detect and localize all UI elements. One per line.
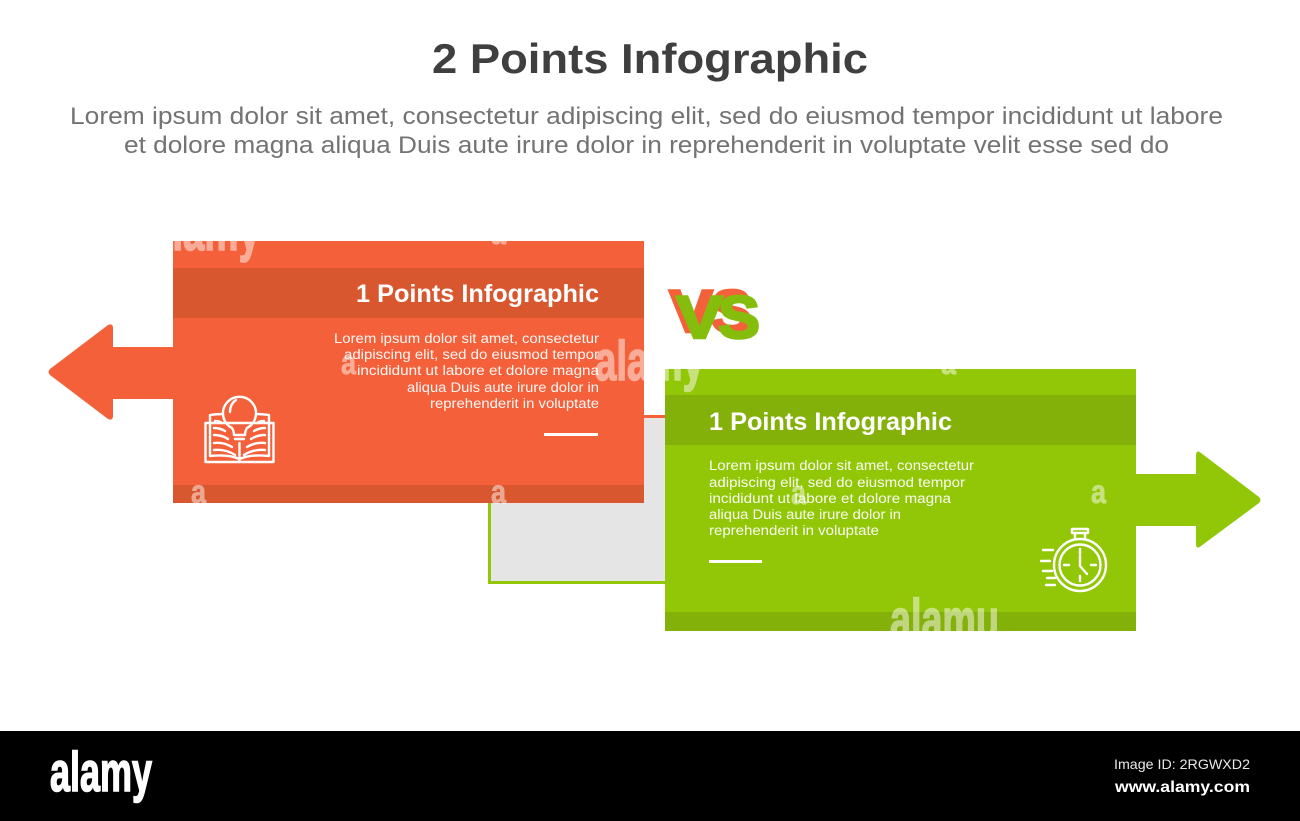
footer bar [0, 731, 1300, 821]
orange layer: V [669, 278, 713, 345]
arrow: right green [1136, 452, 1260, 548]
watermarks: a [491, 473, 507, 510]
panel: second point [665, 369, 1136, 631]
watermarks: a [191, 473, 207, 510]
green layer: V [676, 284, 723, 351]
watermarks: alamy [595, 329, 704, 392]
accent dash [544, 433, 598, 436]
panel heading: 1 Points Infographic [709, 408, 952, 436]
panel body text: adipiscing elit, sed do eiusmod tempor [709, 475, 966, 490]
watermarks: alamu [890, 588, 999, 653]
orange layer [669, 278, 752, 345]
grey backing panel [488, 415, 666, 584]
panel body text: aliqua Duis aute irure dolor in [709, 507, 901, 522]
panel: first point [173, 241, 644, 503]
icon: stopwatch [1041, 529, 1106, 591]
panel body text: aliqua Duis aute irure dolor in [407, 380, 599, 395]
orange layer: S [711, 278, 752, 345]
icon: book with light bulb [206, 397, 274, 462]
watermarks: a [791, 474, 807, 511]
panel body text: incididunt ut labore et dolore magna [709, 491, 952, 506]
subtitle text block [70, 103, 1223, 159]
panel body text: reprehenderit in voluptate [430, 396, 599, 411]
watermarks: a [491, 214, 507, 251]
watermarks: a [341, 344, 357, 381]
watermarks: a [1091, 473, 1107, 510]
panel body text: reprehenderit in voluptate [709, 523, 879, 538]
footer image id: Image ID: 2RGWXD2 [1114, 756, 1250, 772]
panel body text: adipiscing elit, sed do eiusmod tempor [344, 347, 600, 362]
subtitle text block: et dolore magna aliqua Duis aute irure dolor in reprehenderit in voluptate velit esse sed do [124, 132, 1169, 159]
panel body text: Lorem ipsum dolor sit amet, consectetur [709, 458, 975, 473]
footer logo: alamy [50, 740, 152, 803]
watermarks: a [941, 344, 957, 381]
VS badge [669, 278, 760, 351]
watermarks: alamy [151, 198, 260, 263]
watermarks [151, 198, 1107, 653]
arrow: left orange [48, 324, 173, 420]
green layer [676, 284, 760, 351]
panel body text [334, 331, 600, 411]
footer url: www.alamy.com [1114, 779, 1250, 796]
title: 2 Points Infographic [432, 35, 868, 82]
panel body text [709, 458, 975, 538]
subtitle text block: Lorem ipsum dolor sit amet, consectetur adipiscing elit, sed do eiusmod tempor incididunt ut labore [70, 103, 1223, 130]
panel body text: incididunt ut labore et dolore magna [357, 363, 600, 378]
panel body text: Lorem ipsum dolor sit amet, consectetur [334, 331, 600, 346]
accent dash [709, 560, 762, 563]
panel heading: 1 Points Infographic [356, 280, 599, 308]
green layer: S [718, 284, 760, 351]
